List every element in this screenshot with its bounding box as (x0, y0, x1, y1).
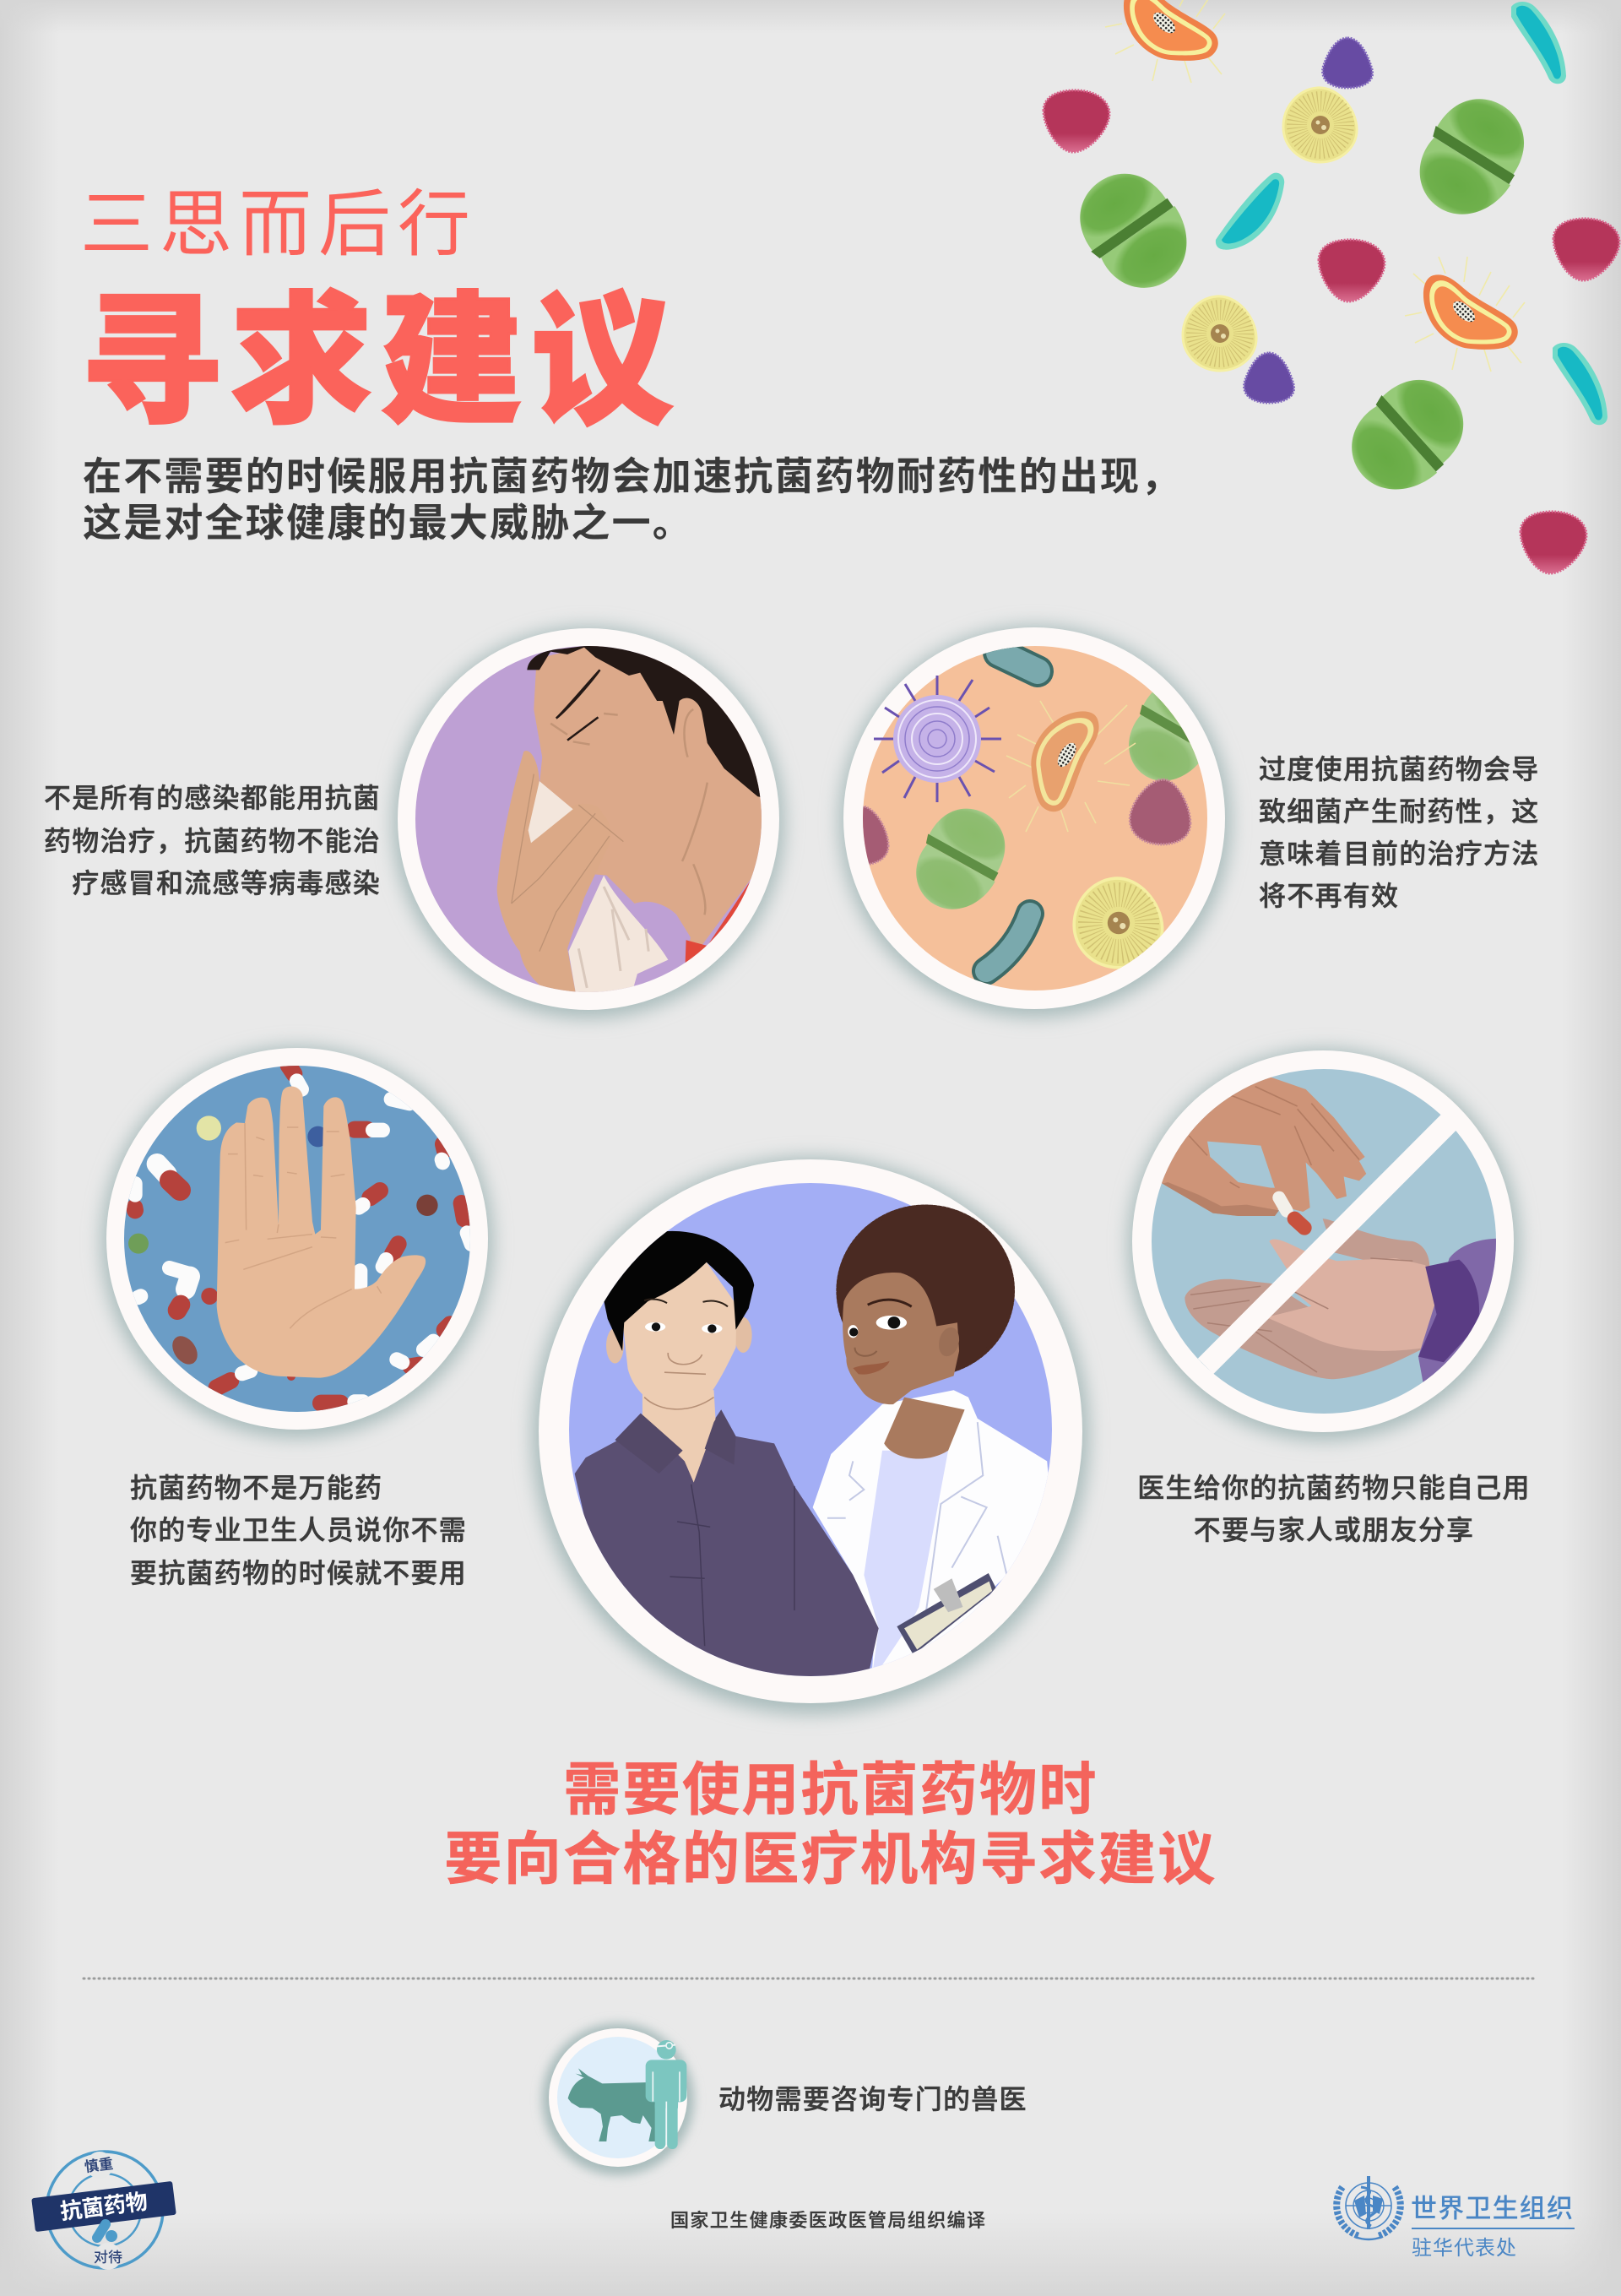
text: not all infections: 疗感冒和流感等病毒感染 (72, 868, 381, 898)
capsule (1279, 1197, 1287, 1211)
credit line: 国家卫生健康委医政医管局组织编译 (670, 2210, 986, 2231)
intro paragraph: 这是对全球健康的最大威胁之一。 (83, 501, 693, 545)
cow (568, 2068, 656, 2141)
text: animals need vets: 动物需要咨询专门的兽医 (718, 2084, 1027, 2114)
logo: use antibiotics with care (31, 2152, 176, 2270)
logo: use antibiotics with care: 慎重 (84, 2156, 114, 2175)
panel: patient and doctor (532, 1157, 1089, 1714)
logo: WHO China office: 世界卫生组织 (1411, 2194, 1574, 2223)
text: do not share antibiotics: 医生给你的抗菌药物只能自己用 (1137, 1473, 1531, 1503)
dotted divider (84, 1978, 1537, 1979)
WHO emblem (1336, 2176, 1401, 2239)
panel: sneezing man (393, 627, 784, 1018)
logo: WHO China office: 驻华代表处 (1412, 2237, 1517, 2260)
no-entry slash (1206, 1120, 1451, 1366)
call to action: 需要使用抗菌药物时 (563, 1758, 1098, 1822)
logo: WHO China office (1336, 2176, 1575, 2260)
clipboard (897, 1573, 996, 1655)
icon: vet and cow (542, 2023, 694, 2175)
call to action: 要向合格的医疗机构寻求建议 (444, 1827, 1217, 1892)
text: antibiotics are not a cure-all (130, 1473, 467, 1588)
text: not all infections: 不是所有的感染都能用抗菌 (44, 783, 381, 813)
call to action (444, 1758, 1217, 1892)
sleeve (1418, 1239, 1500, 1387)
patient (575, 1231, 879, 1681)
text: not all infections (44, 783, 381, 898)
intro paragraph: 在不需要的时候服用抗菌药物会加速抗菌药物耐药性的出现， (83, 454, 1181, 498)
text: overuse leads to resistance: 意味着目前的治疗方法 (1259, 839, 1540, 869)
person (646, 2040, 686, 2149)
text: do not share antibiotics: 不要与家人或朋友分享 (1194, 1515, 1474, 1545)
text: antibiotics are not a cure-all: 你的专业卫生人员说你不需 (130, 1515, 467, 1545)
text: overuse leads to resistance: 将不再有效 (1259, 881, 1399, 911)
panel: do not share pills (1128, 1049, 1520, 1441)
giving hand (1162, 1077, 1366, 1216)
text: antibiotics are not a cure-all: 要抗菌药物的时候就不要用 (130, 1558, 467, 1588)
receiving hand (1323, 1219, 1429, 1267)
hand (217, 1086, 426, 1378)
title line: think twice: 三思而后行 (80, 184, 477, 265)
text: not all infections: 药物治疗，抗菌药物不能治 (44, 826, 381, 856)
logo: use antibiotics with care: 抗菌药物 (59, 2189, 149, 2224)
text: do not share antibiotics (1137, 1473, 1531, 1545)
text: overuse leads to resistance (1259, 754, 1540, 911)
text: antibiotics are not a cure-all: 抗菌药物不是万能药 (130, 1473, 382, 1503)
doctor head (838, 1207, 1012, 1404)
doctor body (813, 1390, 1051, 1681)
main heading: seek advice: 寻求建议 (80, 282, 681, 441)
icon: virus (874, 676, 1001, 802)
text: overuse leads to resistance: 过度使用抗菌药物会导 (1259, 754, 1540, 784)
text: overuse leads to resistance: 致细菌产生耐药性，这 (1259, 796, 1540, 827)
panel: bacteria and virus circle (829, 626, 1234, 1018)
intro paragraph (83, 454, 1181, 545)
bacteria decoration top right (1044, 0, 1619, 573)
panel: stop hand and pills (101, 1046, 493, 1438)
logo: use antibiotics with care: 对待 (94, 2250, 122, 2266)
pills (134, 1066, 471, 1403)
